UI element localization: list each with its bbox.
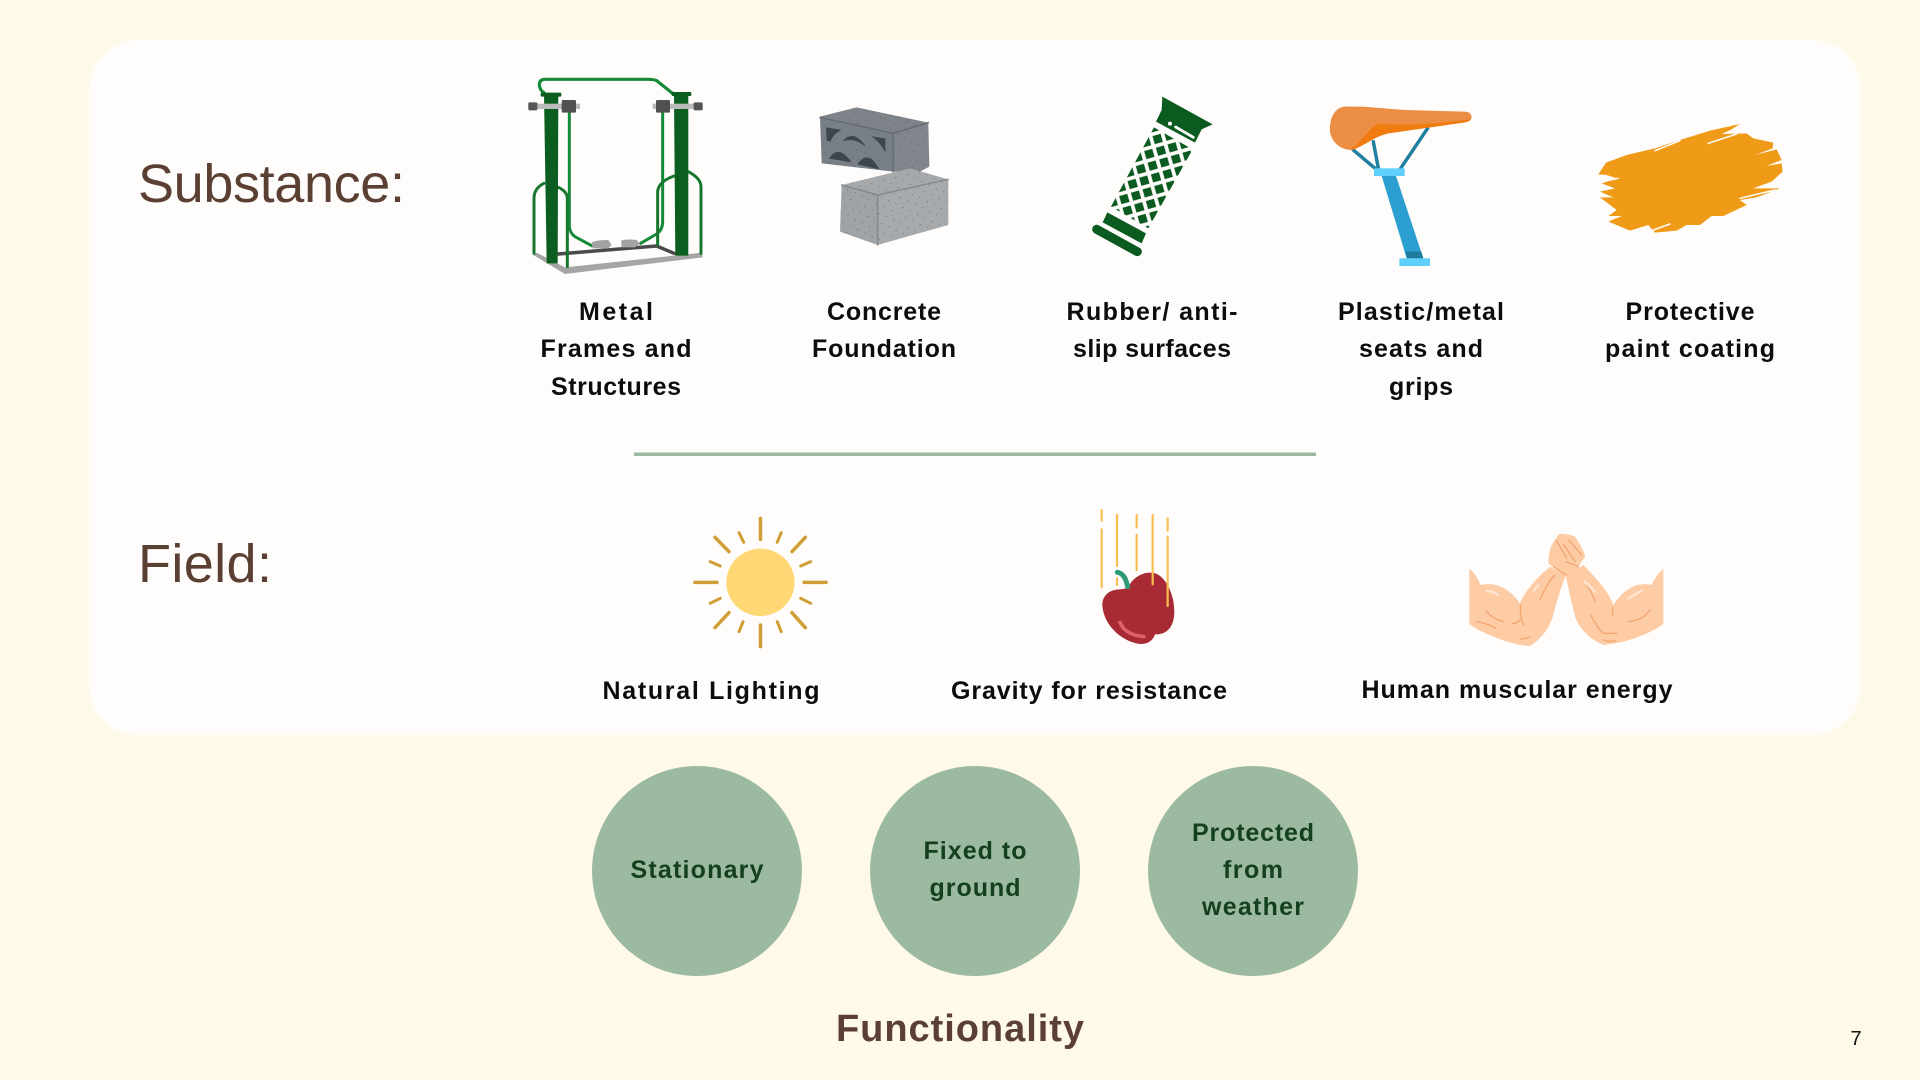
circle: stationary: Stationary	[630, 856, 764, 884]
icon: seat on post	[1330, 106, 1472, 266]
circle: fixed to ground	[870, 766, 1080, 976]
circle: protected from weather: Protected	[1192, 819, 1314, 847]
label: concrete foundation: Foundation	[812, 335, 956, 363]
circle: fixed to ground: ground	[930, 874, 1020, 902]
icon: rubber grip	[1097, 97, 1213, 252]
circle: protected from weather: from	[1223, 856, 1283, 884]
icon: sun	[695, 518, 826, 647]
label: protective paint: paint coating	[1605, 335, 1775, 363]
label: metal frames: Metal	[579, 298, 653, 326]
label: plastic seats: seats and	[1359, 335, 1483, 363]
label: natural lighting: Natural Lighting	[602, 677, 820, 705]
circle: protected from weather: weather	[1201, 893, 1304, 921]
icon: outdoor gym machine	[528, 79, 703, 274]
label: concrete foundation	[812, 298, 956, 363]
heading: field: Field:	[138, 534, 272, 594]
icon: paint brush stroke	[1598, 124, 1783, 233]
label: metal frames	[540, 298, 692, 401]
label: concrete foundation: Concrete	[827, 298, 941, 326]
circle: stationary	[592, 766, 802, 976]
icon: concrete blocks	[820, 107, 948, 245]
label: gravity: Gravity for resistance	[951, 677, 1227, 705]
label: protective paint	[1605, 298, 1775, 363]
label: rubber surfaces	[1066, 298, 1238, 363]
heading: substance: Substance:	[138, 154, 405, 214]
label: plastic seats: grips	[1389, 373, 1453, 401]
circle: fixed to ground: Fixed to	[924, 837, 1026, 865]
label: protective paint: Protective	[1626, 298, 1755, 326]
label: rubber surfaces: Rubber/ anti-	[1066, 298, 1238, 326]
circle: protected from weather	[1148, 766, 1358, 976]
panel: substance and field	[89, 40, 1861, 735]
heading: functionality: Functionality	[836, 1008, 1084, 1050]
label: human energy: Human muscular energy	[1362, 676, 1673, 704]
icon: falling apple	[1102, 510, 1174, 644]
label: metal frames: Frames and	[540, 335, 692, 363]
label: plastic seats: Plastic/metal	[1338, 298, 1504, 326]
label: plastic seats	[1338, 298, 1504, 401]
label: metal frames: Structures	[551, 373, 681, 401]
label: rubber surfaces: slip surfaces	[1073, 335, 1231, 363]
page number: 7	[1850, 1028, 1862, 1050]
icon: arm wrestling arms	[1469, 534, 1663, 646]
